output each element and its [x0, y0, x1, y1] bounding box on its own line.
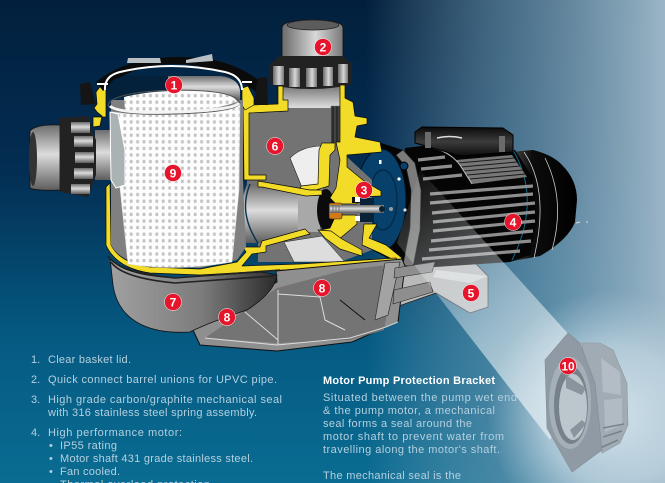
dark ribs behind housing — [331, 106, 353, 143]
numbered feature list: with 316 stainless steel spring assembly. — [47, 407, 257, 419]
callout 8 right: 8 — [319, 281, 326, 295]
strainer bowl — [108, 256, 280, 332]
numbered feature list: • — [49, 466, 53, 478]
motor body — [405, 145, 537, 268]
callout 2 — [314, 38, 332, 56]
callout 9 — [164, 164, 182, 182]
callout 8 left: 8 — [224, 310, 231, 324]
motor — [405, 127, 588, 268]
numbered feature list: 4. — [31, 427, 40, 439]
numbered feature list: Fan cooled. — [60, 466, 120, 478]
lid collar left — [93, 84, 106, 127]
numbered feature list — [31, 354, 282, 483]
bracket flange and blue end disc — [356, 143, 421, 267]
callout 3: 3 — [361, 183, 368, 197]
fan cover — [508, 150, 588, 262]
bracket body text: & the pump motor, a mechanical — [323, 405, 495, 417]
light beam — [397, 170, 572, 440]
callout 1 — [166, 76, 182, 94]
bracket body text — [323, 392, 517, 482]
bracket heading: Motor Pump Protection Bracket — [323, 375, 495, 387]
pump lower body and base — [193, 259, 405, 351]
callout 8 left — [218, 308, 236, 326]
numbered feature list: • — [49, 453, 53, 465]
numbered feature list: • — [49, 440, 53, 452]
terminal box — [415, 127, 513, 156]
volute chamber — [247, 108, 372, 262]
motor foot — [393, 248, 488, 313]
yellow housing section — [93, 84, 402, 275]
strainer basket — [108, 90, 240, 268]
callout 1: 1 — [171, 78, 178, 92]
callout 3 — [356, 182, 372, 198]
cone top rib — [258, 181, 322, 196]
bowl wall and floor — [106, 183, 400, 275]
cooling fins — [418, 157, 535, 259]
callout 10: 10 — [561, 359, 575, 373]
seal housing left — [300, 143, 335, 190]
callout 4: 4 — [510, 215, 517, 229]
bracket rear body — [582, 343, 628, 453]
callout 6 — [266, 138, 284, 154]
callout 8 right — [314, 280, 330, 296]
numbered callouts — [164, 38, 576, 374]
lower limb — [362, 224, 402, 262]
hub bottom — [320, 215, 357, 240]
callout 6: 6 — [272, 139, 279, 153]
numbered feature list: High grade carbon/graphite mechanical seal — [48, 394, 282, 406]
bracket description — [323, 375, 517, 482]
callout 7 — [164, 294, 182, 310]
basket chamber — [111, 100, 246, 268]
right chamber wall — [243, 86, 288, 180]
bracket part 10 — [545, 333, 628, 472]
bracket body text: motor shaft to prevent water from — [323, 431, 504, 443]
numbered feature list: 2. — [31, 374, 40, 386]
strainer lid — [80, 54, 268, 105]
bracket body text: travelling along the motor's shaft. — [323, 444, 500, 456]
callout 10 — [560, 358, 576, 374]
top barrel union — [270, 20, 352, 110]
numbered feature list: Clear basket lid. — [48, 354, 131, 366]
bracket body text: Situated between the pump wet end — [323, 392, 517, 404]
callout 5: 5 — [468, 286, 475, 300]
bracket body text: seal forms a seal around the — [323, 418, 472, 430]
numbered feature list: 3. — [31, 394, 40, 406]
callout 2: 2 — [320, 40, 327, 54]
numbered feature list: High performance motor: — [48, 427, 182, 439]
terminal ramp — [433, 148, 527, 184]
motor rail — [393, 262, 435, 304]
callout 4 — [504, 214, 522, 230]
mechanical seal and motor shaft — [329, 197, 385, 222]
numbered feature list: Motor shaft 431 grade stainless steel. — [60, 453, 253, 465]
callout 9: 9 — [170, 166, 177, 180]
left barrel union — [29, 116, 111, 197]
callout 5 — [462, 284, 480, 302]
diffuser cone — [241, 184, 335, 243]
callout 7: 7 — [170, 295, 177, 309]
bracket front plate — [545, 333, 602, 472]
numbered feature list: IP55 rating — [60, 440, 117, 452]
bracket body text: The mechanical seal is the — [323, 470, 461, 482]
numbered feature list: 1. — [31, 354, 40, 366]
pump illustration — [29, 20, 588, 351]
stem and hub top — [330, 85, 382, 204]
numbered feature list: Quick connect barrel unions for UPVC pipe. — [48, 374, 277, 386]
impeller — [284, 146, 345, 262]
